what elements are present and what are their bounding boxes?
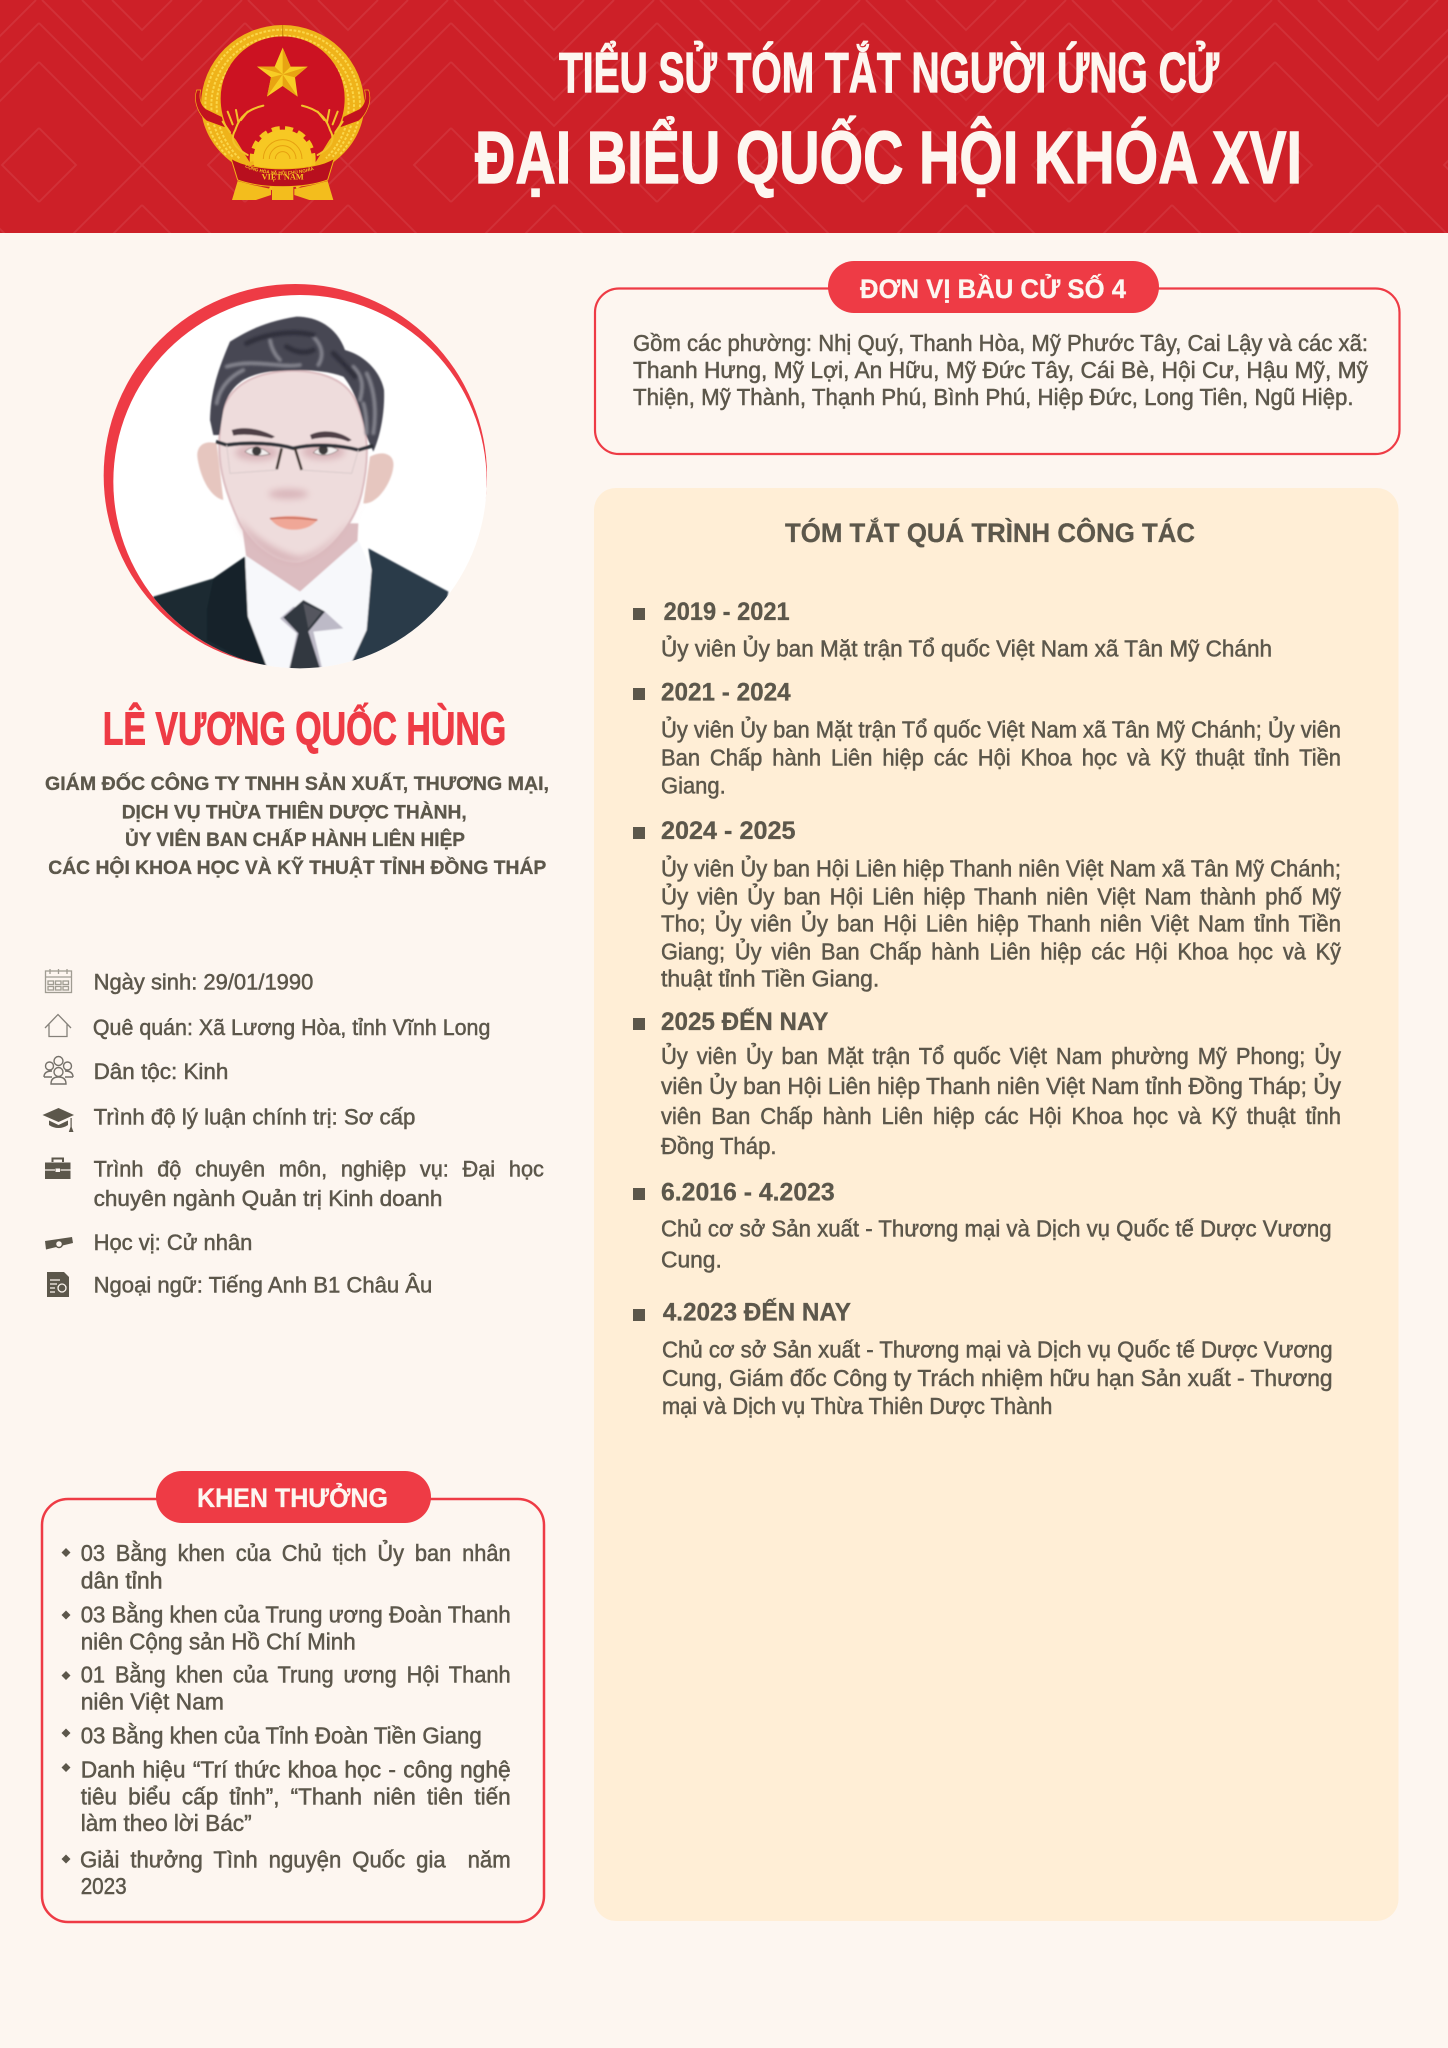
tie — [283, 600, 325, 673]
hair — [210, 317, 384, 452]
electoral unit text: Gồm các phường: Nhị Quý, Thanh Hòa, Mỹ Phước Tây, Cai Lậy và các xã: — [633, 330, 1368, 356]
icon: house — [45, 1014, 71, 1036]
neck — [242, 523, 358, 592]
glasses — [216, 442, 373, 450]
awards list: niên Cộng sản Hồ Chí Minh — [81, 1628, 356, 1654]
cog — [252, 128, 313, 190]
entry 2025 to present: Ủy viên Ủy ban Mặt trận Tổ quốc Việt Nam phường Mỹ Phong; Ủy — [661, 1041, 1341, 1069]
entry 2023 to present: Chủ cơ sở Sản xuất - Thương mại và Dịch vụ Quốc tế Dược Vương — [662, 1337, 1333, 1363]
ears — [197, 442, 393, 503]
ribbons — [195, 90, 370, 128]
awards list: Danh hiệu “Trí thức khoa học - công nghệ — [81, 1756, 511, 1782]
entry 2024-2025: 2024 - 2025 — [661, 817, 796, 845]
entry 2021-2024: 2021 - 2024 — [661, 679, 791, 707]
icon: calendar — [46, 969, 72, 992]
entry 2025 to present: 2025 ĐẾN NAY — [661, 1007, 829, 1036]
awards list: dân tỉnh — [81, 1567, 162, 1593]
electoral unit text: Thanh Hưng, Mỹ Lợi, An Hữu, Mỹ Đức Tây, Cái Bè, Hội Cư, Hậu Mỹ, Mỹ — [633, 357, 1368, 383]
entry 2019-2021 — [661, 598, 1272, 662]
awards list: 01 Bằng khen của Trung ương Hội Thanh — [81, 1661, 511, 1687]
personal info list — [42, 969, 544, 1298]
entry 2021-2024: Ban Chấp hành Liên hiệp các Hội Khoa học và Kỹ thuật tỉnh Tiền — [661, 745, 1341, 771]
position text: ỦY VIÊN BAN CHẤP HÀNH LIÊN HIỆP — [125, 827, 465, 851]
position text: DỊCH VỤ THỪA THIÊN DƯỢC THÀNH, — [122, 799, 467, 823]
position text: CÁC HỘI KHOA HỌC VÀ KỸ THUẬT TỈNH ĐỒNG THÁP — [48, 855, 546, 879]
entry 2023 to present — [662, 1298, 1333, 1419]
star — [257, 48, 308, 97]
icon: people — [44, 1056, 73, 1084]
entry 2025 to present: viên Ban Chấp hành Liên hiệp các Hội Khoa học và Kỹ thuật tỉnh — [661, 1103, 1341, 1129]
entry 2025 to present — [661, 1007, 1341, 1159]
panel: khen thuong — [42, 1471, 544, 1922]
entry 2024-2025: Ủy viên Ủy ban Hội Liên hiệp Thanh niên Việt Nam xã Tân Mỹ Chánh; — [661, 854, 1341, 882]
entry 2023 to present: Cung, Giám đốc Công ty Trách nhiệm hữu hạn Sản xuất - Thương — [662, 1365, 1333, 1391]
awards list: 03 Bằng khen của Chủ tịch Ủy ban nhân — [81, 1538, 511, 1566]
timeline bullets — [633, 608, 645, 1321]
entry 2024-2025: Ủy viên Ủy ban Hội Liên hiệp Thanh niên Việt Nam thành phố Mỹ — [661, 881, 1341, 909]
personal info list: Trình độ chuyên môn, nghiệp vụ: Đại học — [94, 1157, 544, 1182]
icon: national emblem: CỘNG HÒA XÃ HỘI CHỦ NGHĨA — [245, 165, 314, 176]
entry 2023 to present: mại và Dịch vụ Thừa Thiên Dược Thành — [662, 1393, 1052, 1419]
entry 2024-2025: Giang; Ủy viên Ban Chấp hành Liên hiệp các Hội Khoa học và Kỹ — [661, 936, 1341, 964]
entry 2021-2024: Giang. — [661, 772, 726, 798]
awards list: 03 Bằng khen của Trung ương Đoàn Thanh — [81, 1601, 511, 1627]
bullet diamonds — [62, 1548, 70, 1864]
personal info list: Quê quán: Xã Lương Hòa, tỉnh Vĩnh Long — [93, 1015, 490, 1040]
icon: graduation cap — [42, 1108, 74, 1132]
header banner — [0, 0, 1448, 233]
rice sprigs — [223, 106, 343, 155]
entry 2016-2023: Chủ cơ sở Sản xuất - Thương mại và Dịch vụ Quốc tế Dược Vương — [661, 1216, 1332, 1242]
pill heading: electoral unit — [828, 261, 1159, 313]
entry 2021-2024: Ủy viên Ủy ban Mặt trận Tổ quốc Việt Nam xã Tân Mỹ Chánh; Ủy viên — [661, 715, 1341, 743]
awards list: làm theo lời Bác” — [81, 1810, 252, 1836]
entry 2016-2023 — [661, 1179, 1332, 1272]
pill heading: electoral unit: ĐƠN VỊ BẦU CỬ SỐ 4 — [860, 272, 1126, 304]
panel: work history — [594, 488, 1398, 1921]
heading: work history: TÓM TẮT QUÁ TRÌNH CÔNG TÁC — [785, 517, 1195, 548]
awards list: niên Việt Nam — [81, 1688, 224, 1714]
face — [219, 371, 367, 564]
title — [475, 40, 1302, 199]
electoral unit text — [633, 330, 1368, 410]
brows — [232, 428, 352, 442]
awards list: tiêu biểu cấp tỉnh”, “Thanh niên tiên tiến — [81, 1783, 511, 1809]
personal info list: Học vị: Cử nhân — [94, 1230, 252, 1255]
icon: national emblem: VIỆT NAM — [262, 172, 304, 181]
personal info list: Ngoại ngữ: Tiếng Anh B1 Châu Âu — [94, 1273, 432, 1298]
icon: national emblem — [195, 25, 370, 200]
entry 2024-2025 — [661, 817, 1341, 992]
awards list — [80, 1538, 511, 1899]
entry 2019-2021: 2019 - 2021 — [664, 598, 790, 626]
entry 2016-2023: Cung. — [661, 1246, 722, 1272]
icon: diploma — [45, 1237, 73, 1250]
entry 2023 to present: 4.2023 ĐẾN NAY — [663, 1298, 851, 1327]
panel: electoral unit — [595, 261, 1400, 454]
suit — [152, 557, 249, 660]
awards list: Giải thưởng Tình nguyện Quốc gia năm — [80, 1846, 511, 1872]
awards list: 03 Bằng khen của Tỉnh Đoàn Tiền Giang — [81, 1722, 482, 1748]
entry 2024-2025: Tho; Ủy viên Ủy ban Hội Liên hiệp Thanh niên Việt Nam tỉnh Tiền — [661, 909, 1341, 937]
electoral unit text: Thiện, Mỹ Thành, Thạnh Phú, Bình Phú, Hiệp Đức, Long Tiên, Ngũ Hiệp. — [633, 384, 1354, 410]
entry 2021-2024 — [661, 679, 1341, 798]
entry 2025 to present: viên Ủy ban Hội Liên hiệp Thanh niên Việt Nam tỉnh Đồng Tháp; Ủy — [661, 1071, 1341, 1099]
entry 2025 to present: Đồng Tháp. — [661, 1133, 777, 1159]
lips — [270, 516, 317, 530]
personal info list: Trình độ lý luận chính trị: Sơ cấp — [94, 1104, 415, 1129]
personal info list: Dân tộc: Kinh — [94, 1059, 228, 1084]
awards list: 2023 — [81, 1873, 127, 1899]
personal info list: chuyên ngành Quản trị Kinh doanh — [94, 1186, 442, 1211]
portrait — [104, 284, 487, 673]
position text: GIÁM ĐỐC CÔNG TY TNHH SẢN XUẤT, THƯƠNG MẠI, — [45, 771, 549, 795]
entry 2016-2023: 6.2016 - 4.2023 — [661, 1179, 835, 1207]
position text — [45, 771, 549, 879]
eyes — [245, 447, 338, 456]
pill heading: khen thuong — [156, 1471, 431, 1523]
entry 2024-2025: thuật tỉnh Tiền Giang. — [661, 966, 879, 992]
icon: certificate — [47, 1272, 69, 1297]
icon: briefcase — [45, 1158, 70, 1179]
shirt — [245, 540, 372, 673]
entry 2019-2021: Ủy viên Ủy ban Mặt trận Tổ quốc Việt Nam xã Tân Mỹ Chánh — [661, 634, 1272, 662]
personal info list: Ngày sinh: 29/01/1990 — [94, 969, 313, 994]
candidate name: LÊ VƯƠNG QUỐC HÙNG — [103, 702, 506, 754]
pill heading: khen thuong: KHEN THƯỞNG — [197, 1481, 388, 1513]
